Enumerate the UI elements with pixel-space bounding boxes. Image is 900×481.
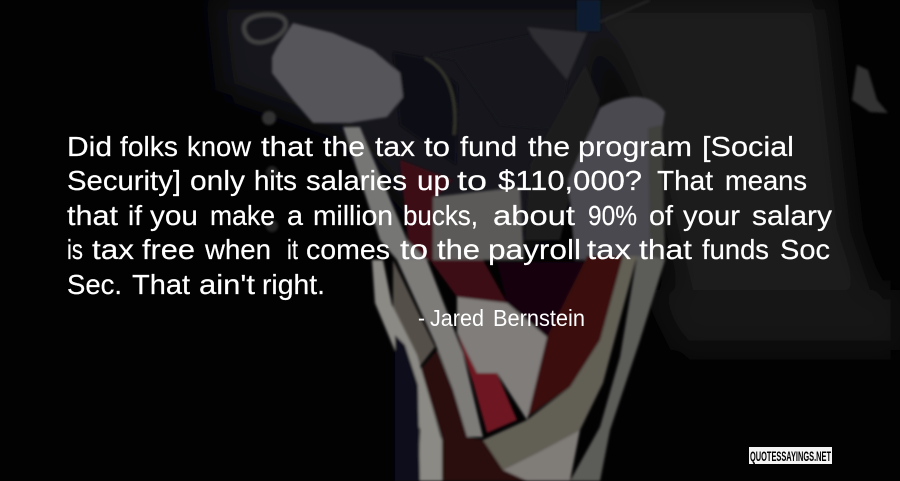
sleeve folds: [430, 35, 568, 130]
quote text: ain't: [199, 269, 255, 300]
quote text: you: [150, 200, 198, 231]
attribution: Jared: [430, 305, 484, 331]
quote text: hits: [254, 165, 297, 196]
top red: [430, 260, 507, 303]
quote text: Soc: [780, 234, 830, 265]
quote text: to: [400, 234, 428, 265]
watermark: QUOTESSAYINGS.NET: [750, 448, 831, 464]
quote text: That: [132, 269, 190, 300]
quote text: the: [323, 131, 365, 162]
quote text: a: [287, 200, 303, 231]
white stripe: [397, 260, 483, 437]
quote text: to: [424, 131, 450, 162]
quote text: Sec.: [67, 269, 122, 300]
white panel: [457, 297, 547, 420]
quote text: of: [649, 200, 673, 231]
icon: right white glove: [525, 65, 665, 260]
quote text: only: [190, 165, 245, 196]
quote text: $110,000?: [498, 165, 642, 196]
quote text: up: [417, 165, 450, 196]
quote text: the: [437, 234, 480, 265]
quote text: that: [67, 200, 118, 231]
quote text: 90%: [588, 200, 637, 231]
quote text: make: [210, 200, 275, 231]
quote text: Security]: [67, 165, 181, 196]
attribution: Bernstein: [493, 305, 585, 331]
quote text: that: [639, 234, 692, 265]
quote text: if: [128, 200, 142, 231]
left fringe: [372, 260, 442, 481]
quote text: folks: [120, 131, 178, 162]
quote text: about: [493, 200, 575, 231]
quote text: salary: [752, 200, 832, 231]
quote text: tax: [92, 234, 134, 265]
quote text: tax: [375, 131, 415, 162]
quote text: free: [142, 234, 195, 265]
lapel pin: [852, 65, 888, 113]
quote text: funds: [702, 234, 769, 265]
quote text: bucks,: [403, 200, 478, 231]
quote text: means: [725, 165, 807, 196]
dark red lower: [420, 350, 527, 481]
icon: left white glove: [244, 15, 403, 232]
beige fold: [393, 260, 435, 370]
quote text: That: [657, 165, 713, 196]
quote text: tax: [587, 234, 631, 265]
quote text: fund: [460, 131, 517, 162]
quote text: know: [187, 131, 252, 162]
bright red: [457, 333, 517, 433]
bottom beige band: [483, 256, 637, 470]
watermark: [749, 447, 832, 464]
quote text: [67, 131, 832, 300]
quote text: it: [287, 234, 298, 265]
attribution: [418, 305, 585, 331]
quote text: when: [204, 234, 271, 265]
quote text: [Social: [702, 131, 794, 162]
upper flag: [400, 160, 453, 260]
quote text: right.: [262, 269, 325, 300]
folded flag: [343, 127, 665, 481]
quote text: payroll: [488, 234, 581, 265]
quote text: million: [313, 200, 393, 231]
quote text: your: [683, 200, 740, 231]
quote text: program: [578, 131, 692, 162]
quote text: that: [261, 131, 313, 162]
quote text: salaries: [306, 165, 407, 196]
attribution: -: [418, 305, 425, 331]
quote text: the: [528, 131, 570, 162]
outer strip: [570, 256, 665, 481]
quote text: to: [457, 165, 487, 196]
quote text: Did: [67, 131, 112, 162]
quote text: is: [67, 234, 83, 265]
quote text: comes: [306, 234, 390, 265]
